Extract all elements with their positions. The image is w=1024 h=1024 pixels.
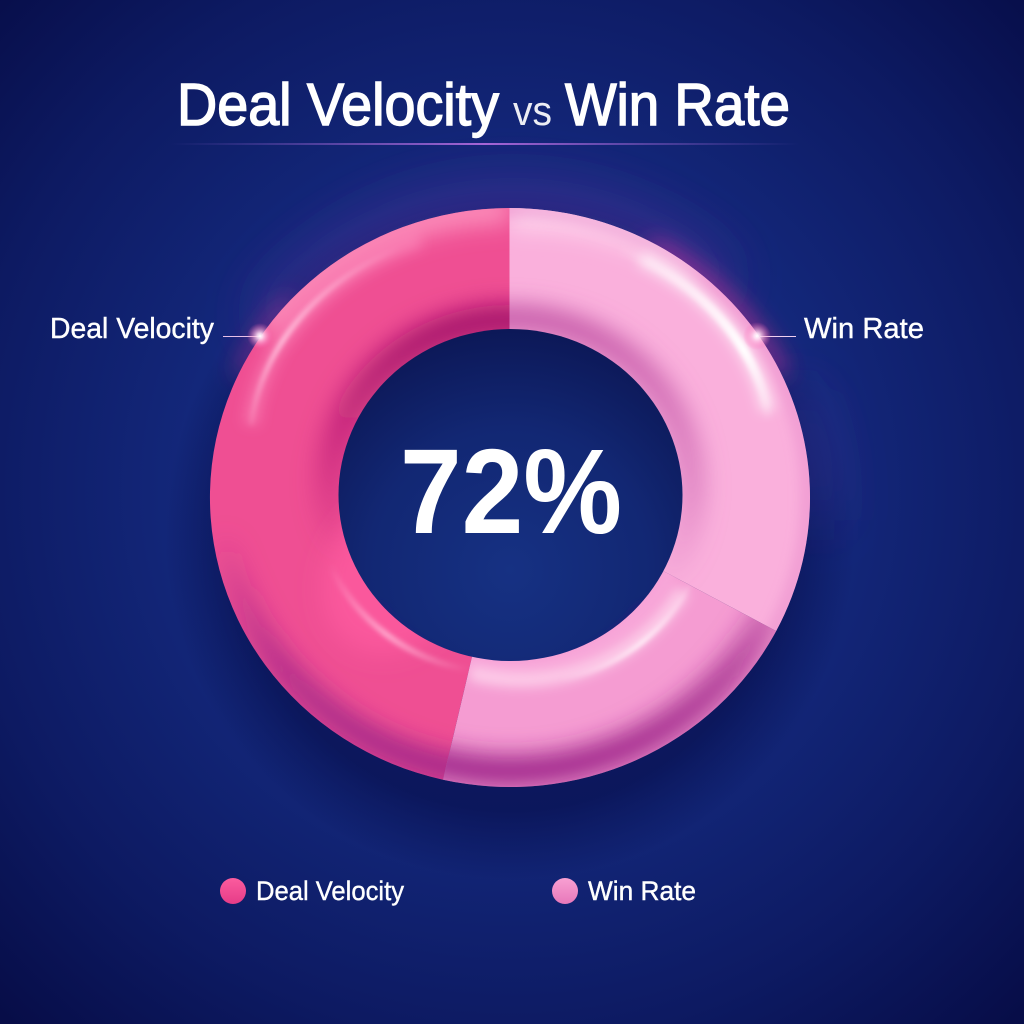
segment: Win Rate lower — [443, 571, 776, 787]
center value: 72%: 72% — [400, 423, 622, 559]
ring glow and shadow — [165, 190, 855, 880]
title underline — [170, 143, 800, 145]
callout: Win Rate: Win Rate — [804, 313, 924, 345]
callout: Deal Velocity: Deal Velocity — [50, 313, 214, 345]
title: Deal Velocity — [177, 72, 499, 138]
center hole — [338, 329, 682, 680]
legend: Win Rate: Win Rate — [588, 876, 696, 906]
callout: Win Rate — [743, 313, 924, 350]
callout: Deal Velocity — [50, 313, 273, 349]
title: vs — [513, 87, 552, 134]
donut chart — [165, 190, 855, 880]
title: Win Rate — [565, 72, 790, 138]
title — [177, 72, 790, 138]
segment: Deal Velocity — [210, 208, 510, 780]
legend: Deal Velocity: Deal Velocity — [256, 876, 404, 906]
segment: Win Rate upper — [510, 208, 810, 631]
